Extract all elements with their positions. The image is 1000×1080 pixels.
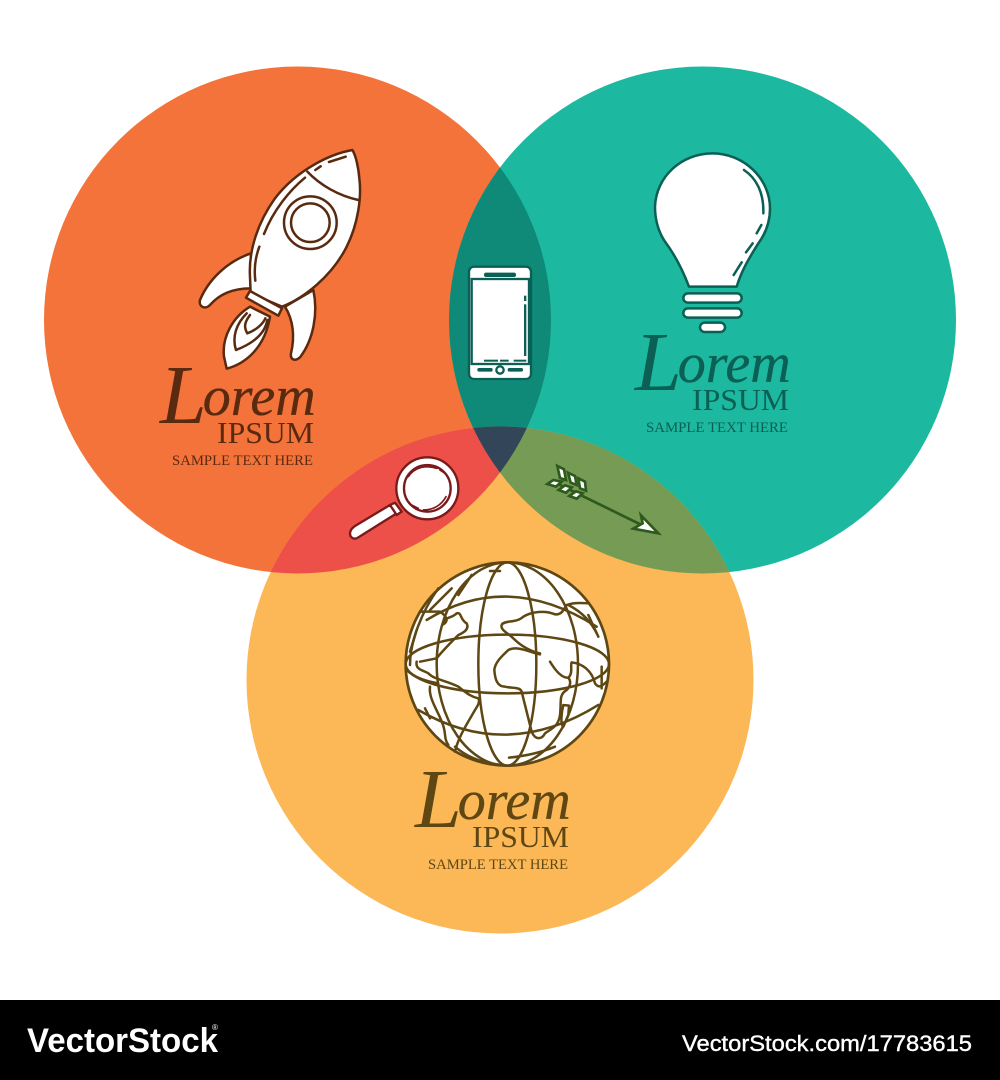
text: orange Lorem: orem	[203, 366, 316, 428]
rocket window	[284, 196, 337, 249]
circle: teal	[449, 66, 956, 574]
icon: arrow	[547, 466, 658, 533]
bulb base bar 1	[683, 293, 742, 303]
icon: magnifying glass	[350, 457, 458, 539]
globe parallels	[406, 635, 609, 693]
text: orange sample: SAMPLE TEXT HERE	[172, 453, 313, 469]
overlap: orange and yellow	[270, 426, 526, 574]
rocket left fin	[200, 253, 251, 307]
phone details	[477, 273, 526, 372]
text: teal sample: SAMPLE TEXT HERE	[646, 420, 788, 436]
footer bar	[0, 1000, 1000, 1080]
arrow shaft	[553, 482, 642, 525]
text: yellow Lorem: orem	[458, 770, 571, 832]
venn diagram circles	[44, 66, 956, 934]
text: yellow sample: SAMPLE TEXT HERE	[428, 857, 568, 873]
rocket nose line	[307, 172, 358, 200]
text: teal Lorem: orem	[678, 333, 791, 395]
rocket body	[250, 150, 360, 307]
footer url text: VectorStock.com/17783615	[682, 1031, 972, 1056]
magnifier handle	[350, 505, 397, 539]
magnifier rim	[396, 457, 458, 519]
text: teal IPSUM: IPSUM	[692, 382, 789, 417]
bulb base bar 2	[683, 308, 742, 318]
rocket highlights	[255, 157, 346, 281]
footer logo text: VectorStock	[27, 1022, 218, 1060]
circle: orange	[44, 66, 551, 574]
bulb base tip	[700, 323, 725, 332]
icon: light bulb	[655, 153, 770, 332]
globe continents	[501, 603, 588, 653]
circle: yellow	[246, 426, 754, 934]
bulb highlights	[734, 170, 763, 275]
bulb glass	[655, 153, 770, 287]
rocket nozzle	[246, 291, 282, 316]
arrow feathers	[557, 466, 566, 480]
globe meridians	[478, 562, 536, 766]
text: orange IPSUM: IPSUM	[217, 415, 314, 450]
text: yellow Lorem: L	[414, 753, 462, 846]
rocket flame	[224, 307, 270, 369]
footer registered mark: ®	[212, 1023, 218, 1032]
arrow head	[633, 515, 658, 533]
globe disc	[406, 562, 609, 766]
phone body	[469, 267, 531, 379]
text: yellow IPSUM: IPSUM	[472, 819, 569, 854]
icon: smartphone	[469, 267, 531, 379]
overlap: orange and teal	[449, 168, 551, 428]
rocket right fin	[285, 290, 315, 360]
text: teal Lorem: L	[634, 316, 682, 409]
overlap: teal and yellow	[473, 426, 730, 574]
overlap: centre	[473, 426, 527, 472]
magnifier highlight	[408, 467, 446, 510]
icon: globe	[406, 562, 609, 766]
phone screen	[472, 279, 529, 364]
icon: rocket	[200, 150, 360, 369]
phone home button	[496, 366, 504, 374]
text: orange Lorem: L	[159, 349, 207, 442]
